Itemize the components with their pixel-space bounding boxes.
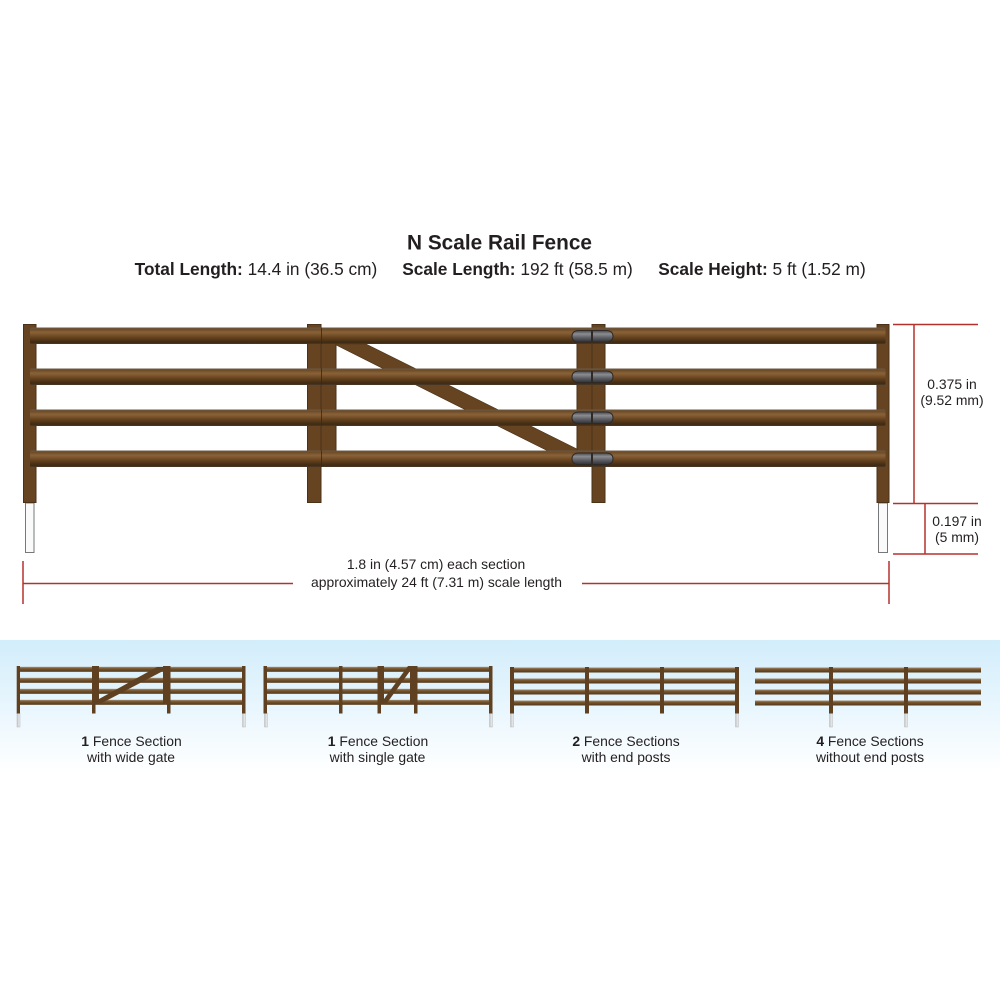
mini fence caption: end posts: 2 Fence Sections bbox=[572, 733, 680, 749]
mini fence: single gate bbox=[264, 666, 492, 727]
title: N Scale Rail Fence bbox=[407, 232, 592, 254]
post depth label bbox=[932, 513, 982, 545]
section length label: 1.8 in (4.57 cm) each section bbox=[347, 556, 525, 572]
height label: (9.52 mm) bbox=[920, 392, 984, 408]
height label: 0.375 in bbox=[927, 376, 977, 392]
mini fence caption: without end posts bbox=[815, 733, 924, 765]
gate diagonal brace bbox=[336, 344, 577, 453]
mini fence: wide gate bbox=[17, 666, 246, 727]
height label bbox=[920, 376, 984, 408]
mini fence caption: wide gate: 1 Fence Section bbox=[81, 733, 182, 749]
mini fence caption: wide gate bbox=[81, 733, 182, 765]
mini fence: without end posts bbox=[755, 667, 981, 727]
rail joints bbox=[320, 328, 322, 467]
fence rails bbox=[30, 328, 886, 467]
section length label: approximately 24 ft (7.31 m) scale length bbox=[311, 574, 562, 590]
mini fence caption: without end posts: 4 Fence Sections bbox=[816, 733, 924, 749]
specifications line bbox=[135, 259, 866, 279]
post depth label: (5 mm) bbox=[935, 529, 979, 545]
mini fence: end posts bbox=[510, 667, 739, 727]
mini fence caption: wide gate: with wide gate bbox=[86, 749, 175, 765]
gate latches bbox=[572, 330, 613, 464]
mounting pins bbox=[26, 503, 888, 552]
specifications line: Scale Height: 5 ft (1.52 m) bbox=[658, 259, 866, 279]
mini fence caption: single gate bbox=[328, 733, 428, 765]
fence posts bbox=[24, 324, 889, 502]
mini fence caption: single gate: 1 Fence Section bbox=[328, 733, 428, 749]
panel: sky gradient band bbox=[0, 640, 1000, 772]
section length label bbox=[311, 556, 562, 590]
post depth label: 0.197 in bbox=[932, 513, 982, 529]
mini fence caption: without end posts: without end posts bbox=[815, 749, 924, 765]
mini fence caption: single gate: with single gate bbox=[329, 749, 426, 765]
mini fence caption: end posts: with end posts bbox=[581, 749, 670, 765]
main fence diagram bbox=[24, 324, 889, 552]
mini fence caption: end posts bbox=[572, 733, 680, 765]
specifications line: Scale Length: 192 ft (58.5 m) bbox=[402, 259, 633, 279]
specifications line: Total Length: 14.4 in (36.5 cm) bbox=[135, 259, 377, 279]
dimension lines bbox=[23, 324, 978, 604]
